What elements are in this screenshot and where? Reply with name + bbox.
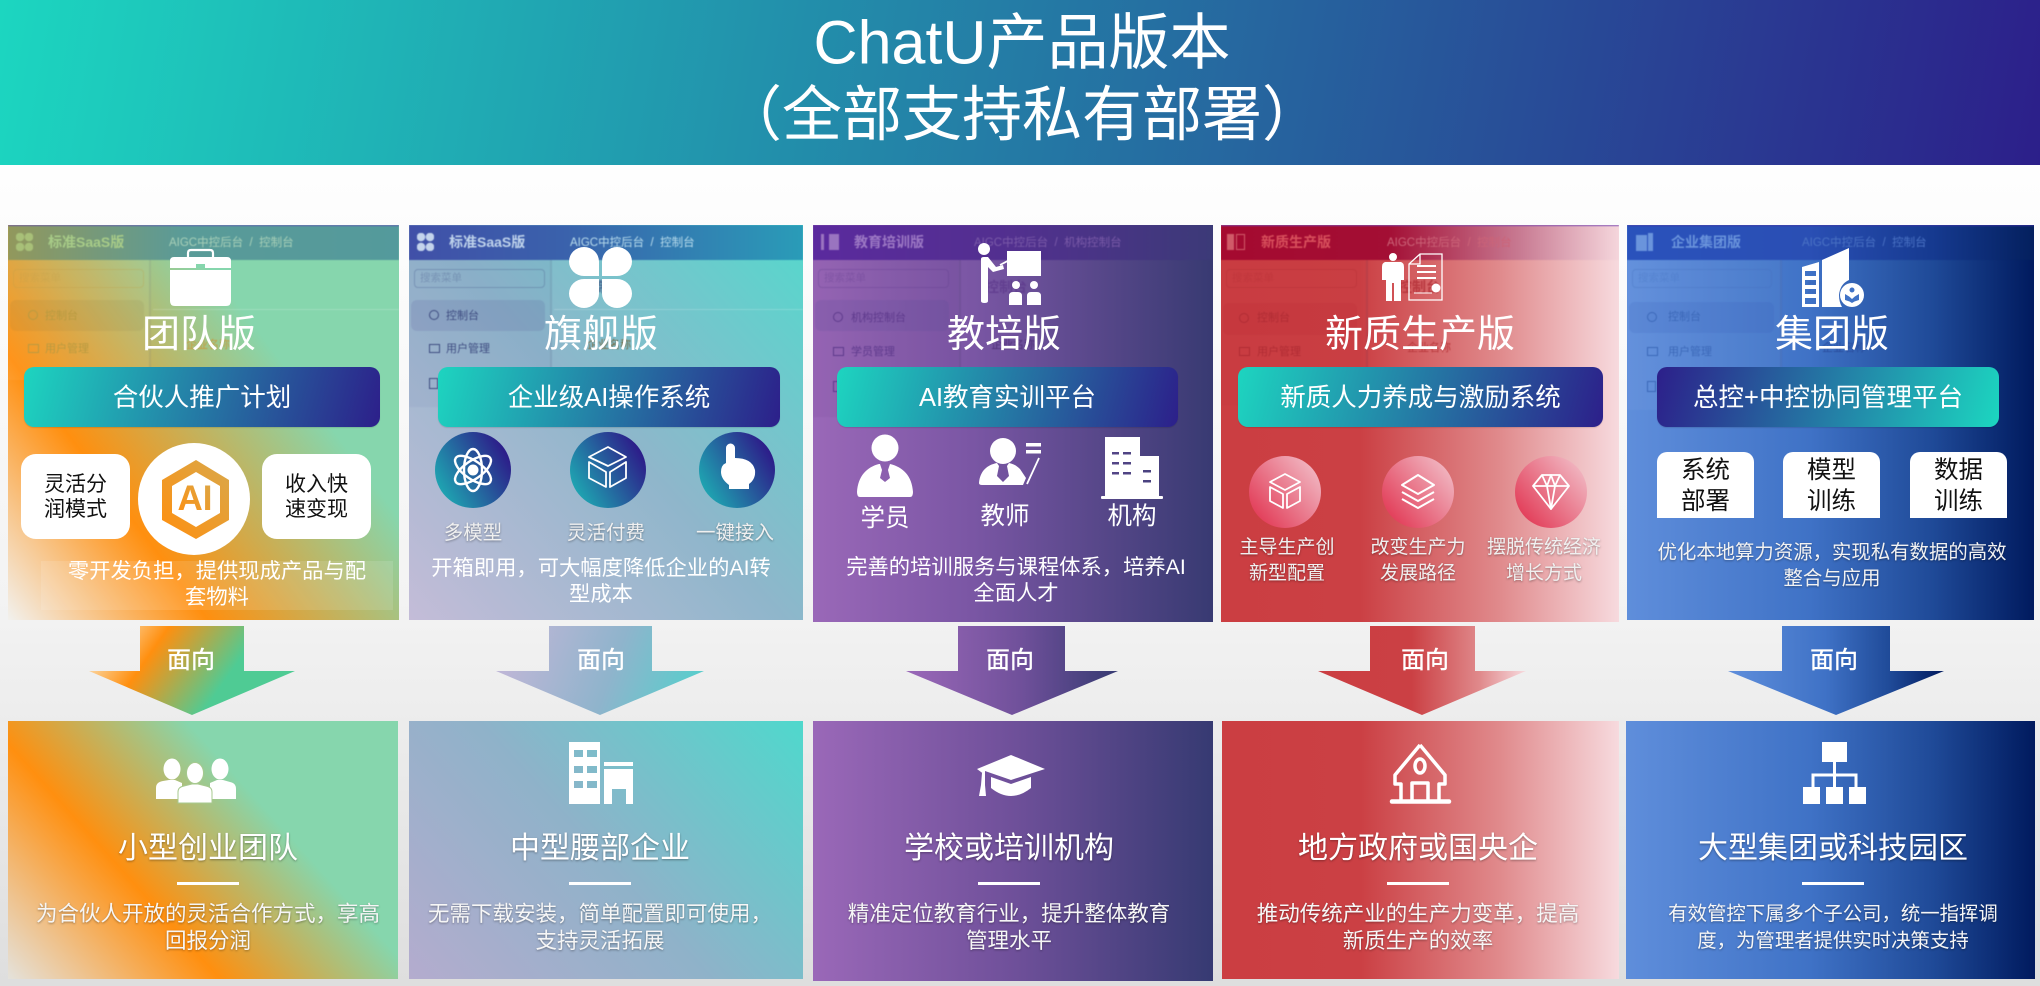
description: 完善的培训服务与课程体系，培养AI xyxy=(846,555,1186,579)
label xyxy=(1487,537,1601,584)
heading: 集团版 xyxy=(1775,314,1889,356)
label: 多模型 xyxy=(444,522,502,544)
arrow: 教培版 面向 xyxy=(906,626,1118,715)
heading: 大型集团或科技园区 xyxy=(1698,832,1968,865)
screenshot background: 企业名称 xyxy=(587,339,631,351)
icon: team xyxy=(156,758,236,804)
screenshot background: 用户管理 xyxy=(446,343,490,355)
screenshot background: 企业名称 xyxy=(1407,342,1451,354)
description: 型成本 xyxy=(569,582,633,606)
description: 零开发负担，提供现成产品与配 xyxy=(68,559,366,583)
heading: 中型腰部企业 xyxy=(510,832,690,865)
arrow label: 面向 xyxy=(577,647,625,674)
screenshot background: 控制台 xyxy=(985,279,1027,295)
description: 整合与应用 xyxy=(1784,567,1880,589)
icon: teacher xyxy=(979,438,1041,485)
description: 新质生产的效率 xyxy=(1343,929,1493,953)
screenshot background: 搜索菜单 xyxy=(19,272,61,284)
screenshot background: 控制台 xyxy=(1257,312,1290,324)
icon: AI badge: AI xyxy=(178,479,212,518)
arrow: 旗舰版 面向 xyxy=(496,626,704,715)
screenshot background xyxy=(8,225,399,380)
screenshot background: 搜索菜单 xyxy=(824,272,866,284)
screenshot background: 用户管理 xyxy=(45,343,89,355)
description: 优化本地算力资源，实现私有数据的高效 xyxy=(1657,542,2007,564)
description xyxy=(428,902,772,953)
heading: 旗舰版 xyxy=(544,314,658,356)
screenshot background: 企业集团版 xyxy=(1671,234,1741,250)
card: 收入快速变现: 收入快 xyxy=(285,472,348,496)
icon: worker and contract xyxy=(1382,253,1443,301)
label: 教师 xyxy=(980,503,1030,530)
description xyxy=(1657,542,2007,589)
panel: 大型集团或科技园区 xyxy=(1626,721,2035,979)
title text: ChatU产品版本 xyxy=(814,8,1230,76)
screenshot background: 控制台 xyxy=(1668,311,1701,323)
card: 数据训练: 数据 xyxy=(1934,457,1983,484)
screenshot background: 控制台 xyxy=(1398,279,1440,295)
arrow label: 面向 xyxy=(167,647,215,674)
banner: AI教育实训平台 xyxy=(919,384,1096,412)
arrow: 集团版 面向 xyxy=(1728,626,1944,715)
arrow label: 面向 xyxy=(986,647,1034,674)
description: 精准定位教育行业，提升整体教育 xyxy=(848,902,1170,926)
description: 度，为管理者提供实时决策支持 xyxy=(1697,930,1969,952)
icon: org chart xyxy=(1803,742,1866,804)
banner: 合伙人推广计划 xyxy=(113,384,291,412)
arrow label: 面向 xyxy=(1810,647,1858,674)
banner xyxy=(1657,367,1999,427)
screenshot background: 控制台 xyxy=(1807,279,1849,295)
card: 系统部署: 部署 xyxy=(1681,488,1730,515)
description xyxy=(848,902,1170,953)
heading: 团队版 xyxy=(142,314,256,356)
description: 支持灵活拓展 xyxy=(535,929,665,953)
screenshot background: 搜索菜单 xyxy=(1638,272,1680,284)
description: 套物料 xyxy=(185,585,249,609)
label: 摆脱传统经济 xyxy=(1487,537,1601,558)
screenshot background: 企业名称 xyxy=(1822,342,1866,354)
icon: cube xyxy=(1249,456,1321,528)
title text: （全部支持私有部署） xyxy=(722,82,1322,148)
label: 新型配置 xyxy=(1249,563,1325,584)
description xyxy=(431,556,771,606)
card: 灵活分润模式 xyxy=(21,454,130,539)
description xyxy=(68,559,366,609)
banner xyxy=(837,367,1178,427)
card: 模型训练: 训练 xyxy=(1807,488,1856,515)
screenshot background: 标准SaaS版 xyxy=(449,234,525,250)
icon: pointing hand xyxy=(699,432,775,508)
screenshot background xyxy=(813,225,1169,393)
panel: 集团版 xyxy=(1627,225,2034,620)
card: 数据训练 xyxy=(1910,452,2007,518)
label xyxy=(1239,537,1335,584)
icon: clover xyxy=(569,247,632,308)
icon: teacher at board xyxy=(978,243,1041,305)
label: 学员 xyxy=(860,505,910,532)
banner xyxy=(24,367,380,427)
description: 无需下载安装，简单配置即可使用， xyxy=(428,902,772,926)
description: 开箱即用，可大幅度降低企业的AI转 xyxy=(431,556,771,580)
heading: 学校或培训机构 xyxy=(904,832,1114,865)
screenshot background: 用户管理 xyxy=(1257,346,1301,358)
icon: AI badge xyxy=(138,443,250,555)
description box xyxy=(41,561,393,610)
heading: 教培版 xyxy=(947,314,1061,356)
arrow: 团队版 面向 xyxy=(89,626,295,715)
description: 回报分润 xyxy=(165,929,251,953)
icon: graduation cap xyxy=(977,755,1045,796)
icon: box xyxy=(570,432,646,508)
screenshot background xyxy=(1627,225,2034,392)
screenshot background: 控制台 xyxy=(45,310,78,322)
card: 收入快速变现: 速变现 xyxy=(285,498,348,520)
screenshot background: 用户管理 xyxy=(1668,346,1712,358)
label xyxy=(1370,536,1466,584)
icon: briefcase xyxy=(170,248,231,306)
icon: student xyxy=(857,434,913,497)
card: 模型训练: 模型 xyxy=(1807,457,1856,484)
arrow label: 面向 xyxy=(1401,647,1449,674)
icon: layers xyxy=(1382,456,1454,528)
banner xyxy=(438,367,780,427)
icon: atom xyxy=(435,432,511,508)
description xyxy=(1668,903,1998,952)
description: 为合伙人开放的灵活合作方式，享高 xyxy=(36,902,380,926)
screenshot background: 控制台 xyxy=(446,310,479,322)
title text xyxy=(722,8,1322,148)
description: 管理水平 xyxy=(966,929,1052,953)
screenshot background xyxy=(409,225,803,390)
panel: 团队版 xyxy=(8,225,399,620)
panel: 新质生产版 xyxy=(1221,225,1619,622)
screenshot background: 搜索菜单 xyxy=(1232,272,1274,284)
panel: 小型创业团队 xyxy=(8,721,398,979)
screenshot background: AIGC中控后台 / 机构控制台 xyxy=(974,237,1122,249)
screenshot background: AIGC中控后台 / 控制台 xyxy=(570,237,695,249)
icon: group buildings xyxy=(1802,248,1864,307)
screenshot background: AIGC中控后台 / 控制台 xyxy=(1802,237,1927,249)
label: 主导生产创 xyxy=(1239,537,1335,558)
panel: 地方政府或国央企 xyxy=(1222,721,1619,979)
screenshot background: 新质生产版 xyxy=(1261,234,1331,250)
screenshot background: AIGC中控后台 / 控制台 xyxy=(169,237,294,249)
heading: 地方政府或国央企 xyxy=(1298,832,1538,865)
icon: institution building xyxy=(1101,437,1163,499)
panel: 教培版 xyxy=(813,225,1213,622)
banner: 总控+中控协同管理平台 xyxy=(1693,384,1963,412)
card: 系统部署: 系统 xyxy=(1681,457,1730,484)
label: 机构 xyxy=(1108,503,1156,530)
heading: 新质生产版 xyxy=(1325,314,1515,356)
banner: 新质人力养成与激励系统 xyxy=(1280,384,1561,412)
arrow: 新质生产版 面向 xyxy=(1318,626,1526,715)
label: 改变生产力 xyxy=(1370,537,1466,558)
card: 收入快速变现 xyxy=(262,454,371,539)
label: 一键接入 xyxy=(696,522,774,544)
screenshot background: 学员管理 xyxy=(851,346,895,358)
title banner xyxy=(0,0,2040,165)
card: 灵活分润模式: 灵活分 xyxy=(44,472,107,496)
screenshot background: 标准SaaS版 xyxy=(48,234,124,250)
label: 灵活付费 xyxy=(567,522,645,544)
label: 增长方式 xyxy=(1506,563,1582,584)
screenshot background: 控制台 xyxy=(584,279,626,295)
screenshot background: 教育培训版 xyxy=(854,234,924,250)
banner xyxy=(1238,367,1603,427)
label: 发展路径 xyxy=(1380,563,1456,584)
screenshot background xyxy=(1221,225,1619,367)
description: 有效管控下属多个子公司，统一指挥调 xyxy=(1668,903,1998,925)
icon: office building xyxy=(569,742,633,804)
description xyxy=(1256,902,1579,953)
card: 模型训练 xyxy=(1783,452,1880,518)
description xyxy=(36,902,380,953)
description xyxy=(846,555,1186,605)
description: 全面人才 xyxy=(973,581,1059,605)
icon: diamond xyxy=(1515,456,1587,528)
card: 灵活分润模式: 润模式 xyxy=(44,498,107,520)
card: 系统部署 xyxy=(1657,452,1754,518)
card: 数据训练: 训练 xyxy=(1934,488,1983,515)
heading: 小型创业团队 xyxy=(118,832,298,865)
screenshot background: 搜索菜单 xyxy=(420,272,462,284)
panel: 学校或培训机构 xyxy=(813,721,1213,981)
panel: 中型腰部企业 xyxy=(409,721,803,979)
icon: government building xyxy=(1390,744,1452,804)
screenshot background: 企业名称 xyxy=(991,339,1035,351)
banner: 企业级AI操作系统 xyxy=(508,384,710,412)
panel: 旗舰版 xyxy=(409,225,803,620)
description: 推动传统产业的生产力变革，提高 xyxy=(1257,902,1579,926)
screenshot background: AIGC中控后台 / 控制台 xyxy=(1387,237,1512,249)
screenshot background: 企业名称 xyxy=(186,339,230,351)
screenshot background: 机构控制台 xyxy=(851,312,906,324)
